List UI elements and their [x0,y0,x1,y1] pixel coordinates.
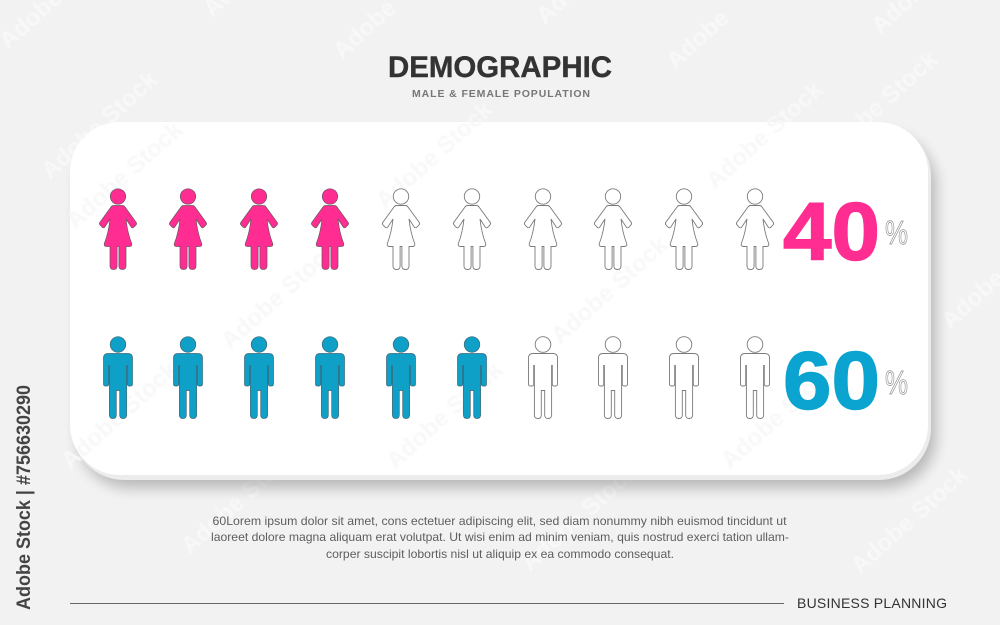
watermark on card: Adobe Stock [56,356,184,474]
panel: card [70,122,936,488]
watermark pattern: Adobe Stock [516,458,644,576]
watermark on card: Adobe Stock [701,76,829,194]
outline female icons [382,189,774,270]
male percentage: 60 [783,336,880,426]
watermark pattern: Adobe Stock [176,441,304,559]
female percentage: 40 [783,186,880,278]
title: DEMOGRAPHIC [388,51,612,84]
watermark pattern: Adobe Stock [36,66,164,184]
watermark pattern: Adobe Stock [846,461,974,579]
footer label: BUSINESS PLANNING [797,595,947,611]
watermark on card: Adobe Stock [381,356,509,474]
filled male icons [104,337,486,418]
body text: 60Lorem ipsum dolor sit amet, cons ectetuer adipiscing elit, sed diam nonummy nibh euismod tincidunt ut [212,514,787,528]
watermark pattern: Adobe [661,4,735,74]
outline male icons [528,337,770,418]
watermark on card: Adobe Stock [716,356,844,474]
female pictogram row: 4 of 10 filled [99,189,774,270]
body text: corper suscipit lobortis nisl ut aliquip ex ea commodo consequat. [326,547,674,561]
male pictogram row: 6 of 10 filled [104,337,770,418]
footer rule [70,603,784,604]
female percentage: % [885,214,908,251]
body text: laoreet dolore magna aliquam erat volutpat. Ut wisi enim ad minim veniam, quis nostrud exerci tation ullam- [211,530,789,544]
body text [211,514,789,561]
watermark on card: Adobe Stock [216,236,344,354]
male percentage: % [885,364,908,401]
watermark pattern: Adobe Stock [816,46,944,164]
watermark on card: Adobe Stock [371,96,499,214]
filled female icons [99,189,349,270]
subtitle: MALE & FEMALE POPULATION [412,88,590,100]
stock id: Adobe Stock | #756630290 [14,385,35,610]
watermark on card [56,76,844,474]
watermark on card: Adobe Stock [546,231,674,349]
watermark on card: Adobe Stock [61,116,189,234]
